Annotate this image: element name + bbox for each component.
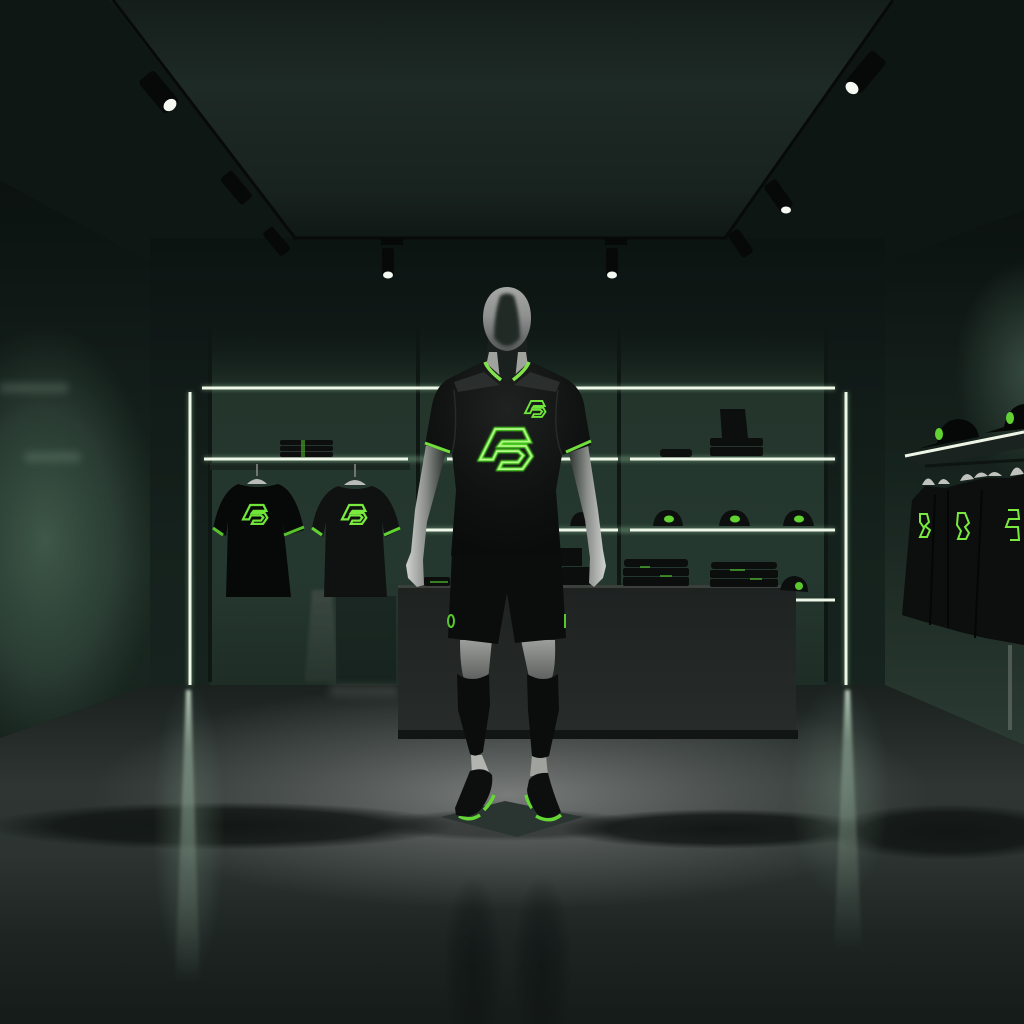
shoe soles xyxy=(459,795,561,820)
left wall bright streaks xyxy=(0,383,80,462)
shoes xyxy=(455,769,561,818)
back wall xyxy=(150,238,885,688)
spotlights xyxy=(138,49,887,278)
chest logo small xyxy=(525,401,546,417)
light reflections on floor xyxy=(175,690,862,985)
track lights rail xyxy=(113,0,893,238)
black boxes on second shelf xyxy=(660,409,763,457)
sleeve seams xyxy=(452,390,562,455)
green collar xyxy=(485,362,529,380)
folded stacks on counter xyxy=(424,548,808,592)
main logo xyxy=(480,429,532,469)
shorts xyxy=(448,552,566,644)
counter xyxy=(398,587,796,730)
left wall light patch xyxy=(0,351,142,724)
head xyxy=(483,287,531,351)
neck xyxy=(485,340,528,382)
socks xyxy=(457,674,559,758)
right wall shelf with caps xyxy=(905,404,1024,466)
shelf uprights xyxy=(210,325,826,682)
legs xyxy=(460,640,555,776)
caps on third shelf xyxy=(570,510,814,526)
ceiling xyxy=(110,0,895,238)
mannequin floor reflection xyxy=(443,875,572,1024)
folded stack on top shelf xyxy=(280,440,333,457)
mannequin xyxy=(406,287,606,837)
face shadow xyxy=(494,294,520,346)
floor xyxy=(0,685,1024,1024)
wall shadow below t-shirts xyxy=(336,596,396,684)
floor shadow band xyxy=(0,802,1024,860)
shelf bracket below top shelf xyxy=(210,463,410,470)
wall cast light below t-shirts xyxy=(305,590,338,682)
counter top edge xyxy=(398,585,796,588)
right wall xyxy=(885,210,1024,745)
glowing light strips xyxy=(190,388,846,685)
platform xyxy=(441,801,583,837)
counter base shadow xyxy=(398,730,798,739)
shorts logos xyxy=(448,614,565,628)
ceiling side right xyxy=(725,0,1024,262)
hanging t-shirt right xyxy=(312,464,400,597)
wide reflections on floor xyxy=(153,680,890,980)
right wall light patch xyxy=(968,278,1024,458)
neck highlight xyxy=(486,352,528,380)
ceiling side left xyxy=(0,0,295,262)
shoulder panels xyxy=(454,372,560,392)
arms xyxy=(406,445,606,587)
left wall xyxy=(0,180,150,738)
floor centre sheen xyxy=(90,680,930,910)
sleeve cuffs xyxy=(425,441,591,452)
hanging t-shirt left xyxy=(213,464,304,597)
main logo glow xyxy=(480,429,532,469)
back floor light strip xyxy=(330,685,398,697)
hoodies on rail xyxy=(902,467,1024,645)
right wall pole xyxy=(1008,645,1012,730)
jersey xyxy=(425,361,591,556)
shelf wall panel xyxy=(210,325,826,685)
